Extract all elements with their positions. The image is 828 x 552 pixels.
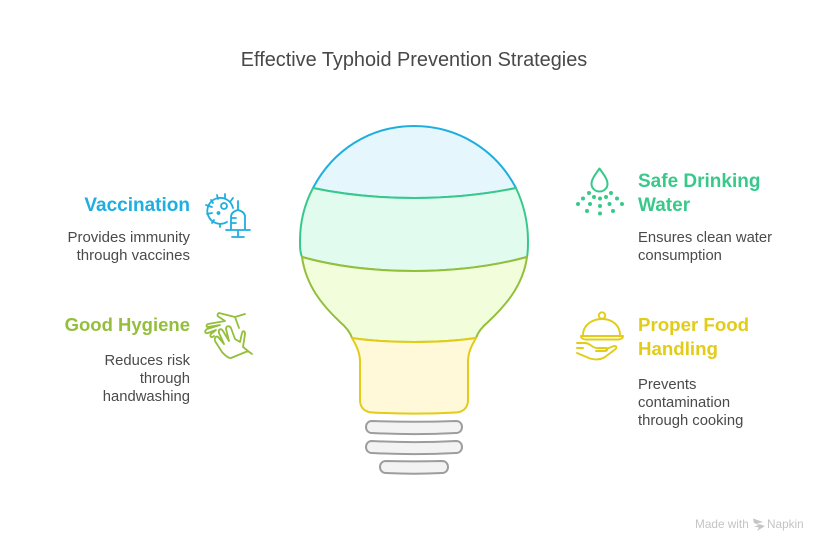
bulb segment: good hygiene [302, 257, 527, 342]
bulb base ring 1 [366, 421, 462, 434]
watermark: Made with Napkin: Napkin [767, 517, 804, 531]
watermark: Made with Napkin [695, 517, 804, 531]
text: vaccination description: Provides immunity [67, 229, 190, 246]
text: hygiene description: through [140, 371, 190, 387]
heading: Proper Food Handling: Handling [638, 338, 718, 359]
text: vaccination description: through vaccines [77, 247, 190, 264]
heading: Vaccination: Vaccination [84, 195, 190, 216]
icon: food cloche on hand [577, 312, 623, 359]
icon: Napkin logo [753, 518, 765, 531]
text: hygiene description: Reduces risk [104, 353, 191, 369]
text: hygiene description: handwashing [103, 389, 190, 405]
bulb segment: proper food handling [352, 338, 476, 414]
icon: water drop with droplets [576, 168, 624, 216]
text: food description: contamination [638, 395, 730, 411]
text: water description: consumption [638, 248, 722, 264]
text: food description: Prevents [638, 377, 696, 393]
lightbulb [300, 126, 528, 474]
icon: washing hands [205, 313, 252, 358]
heading: Good Hygiene: Good Hygiene [65, 314, 190, 335]
icon: virus and syringe [206, 194, 250, 237]
bulb segment: safe drinking water [300, 188, 528, 271]
bulb base ring 3 [380, 461, 448, 474]
text: food description: through cooking [638, 413, 743, 429]
text: water description: Ensures clean water [638, 230, 772, 246]
heading: Safe Drinking Water: Water [638, 195, 691, 216]
heading: Proper Food Handling: Proper Food [638, 314, 749, 335]
bulb segment: vaccination [313, 126, 516, 198]
bulb base ring 2 [366, 441, 462, 454]
watermark: Made with Napkin: Made with [695, 517, 749, 531]
title: Effective Typhoid Prevention Strategies [241, 49, 587, 71]
heading: Safe Drinking Water: Safe Drinking [638, 171, 760, 192]
